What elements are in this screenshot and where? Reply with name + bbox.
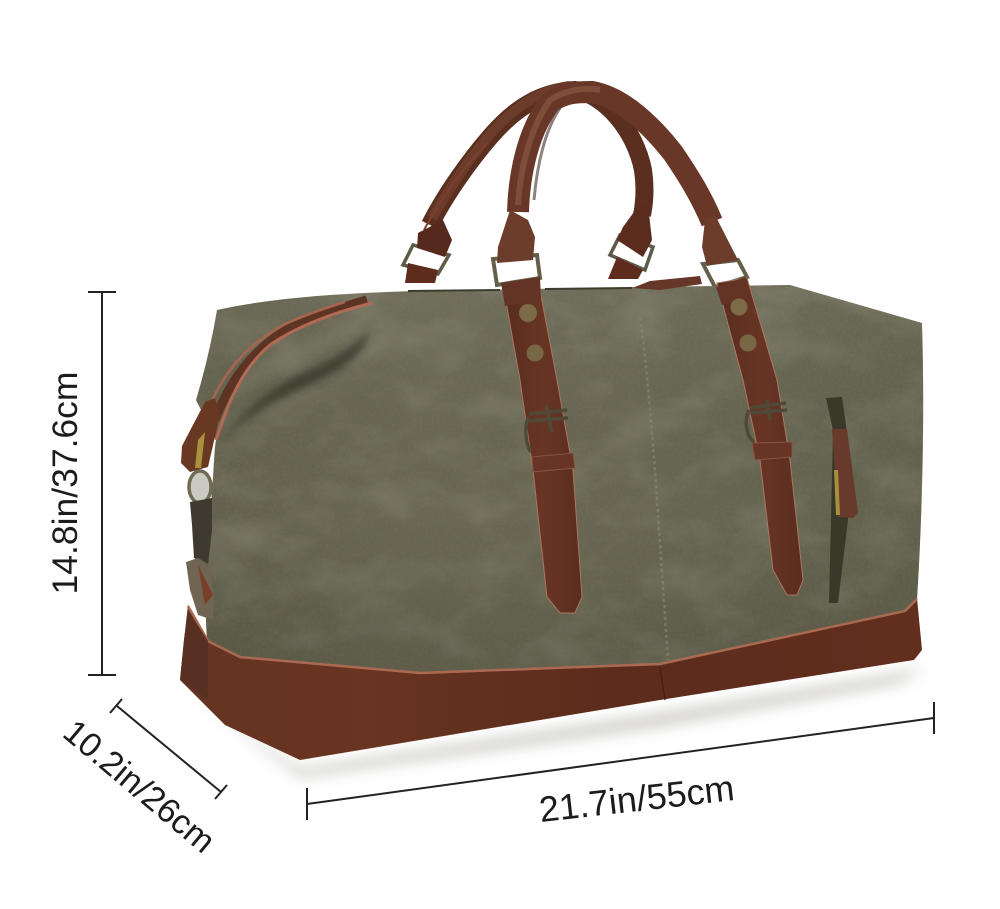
icon: duffel bag illustration bbox=[180, 86, 925, 778]
depth dimension bbox=[56, 699, 227, 861]
side zipper bbox=[208, 300, 372, 440]
depth label: 10.2in/26cm bbox=[56, 712, 222, 861]
width dimension bbox=[307, 702, 934, 830]
left strap bbox=[501, 277, 582, 613]
back handle rings and tabs bbox=[403, 245, 449, 274]
leather base bbox=[180, 598, 922, 760]
right strap bbox=[716, 277, 803, 595]
height dimension bbox=[45, 292, 116, 675]
front pocket zipper bbox=[826, 397, 858, 603]
width label: 21.7in/55cm bbox=[537, 767, 736, 830]
canvas body bbox=[196, 285, 923, 674]
right buckle bbox=[746, 400, 787, 442]
top edge opening bbox=[408, 288, 632, 291]
height label: 14.8in/37.6cm bbox=[45, 371, 85, 595]
front handle rings and tabs bbox=[493, 255, 540, 285]
top zipper tab bbox=[632, 276, 702, 290]
floor shadow bbox=[195, 668, 925, 778]
left zipper pull and clip bbox=[181, 398, 220, 620]
center seam bbox=[640, 318, 668, 660]
top flap shadow bbox=[222, 330, 370, 442]
left buckle bbox=[526, 405, 568, 452]
left strap tab and rivets bbox=[501, 277, 541, 306]
flap light bbox=[232, 325, 365, 405]
back handle bbox=[403, 86, 653, 283]
front handle bbox=[493, 89, 747, 287]
